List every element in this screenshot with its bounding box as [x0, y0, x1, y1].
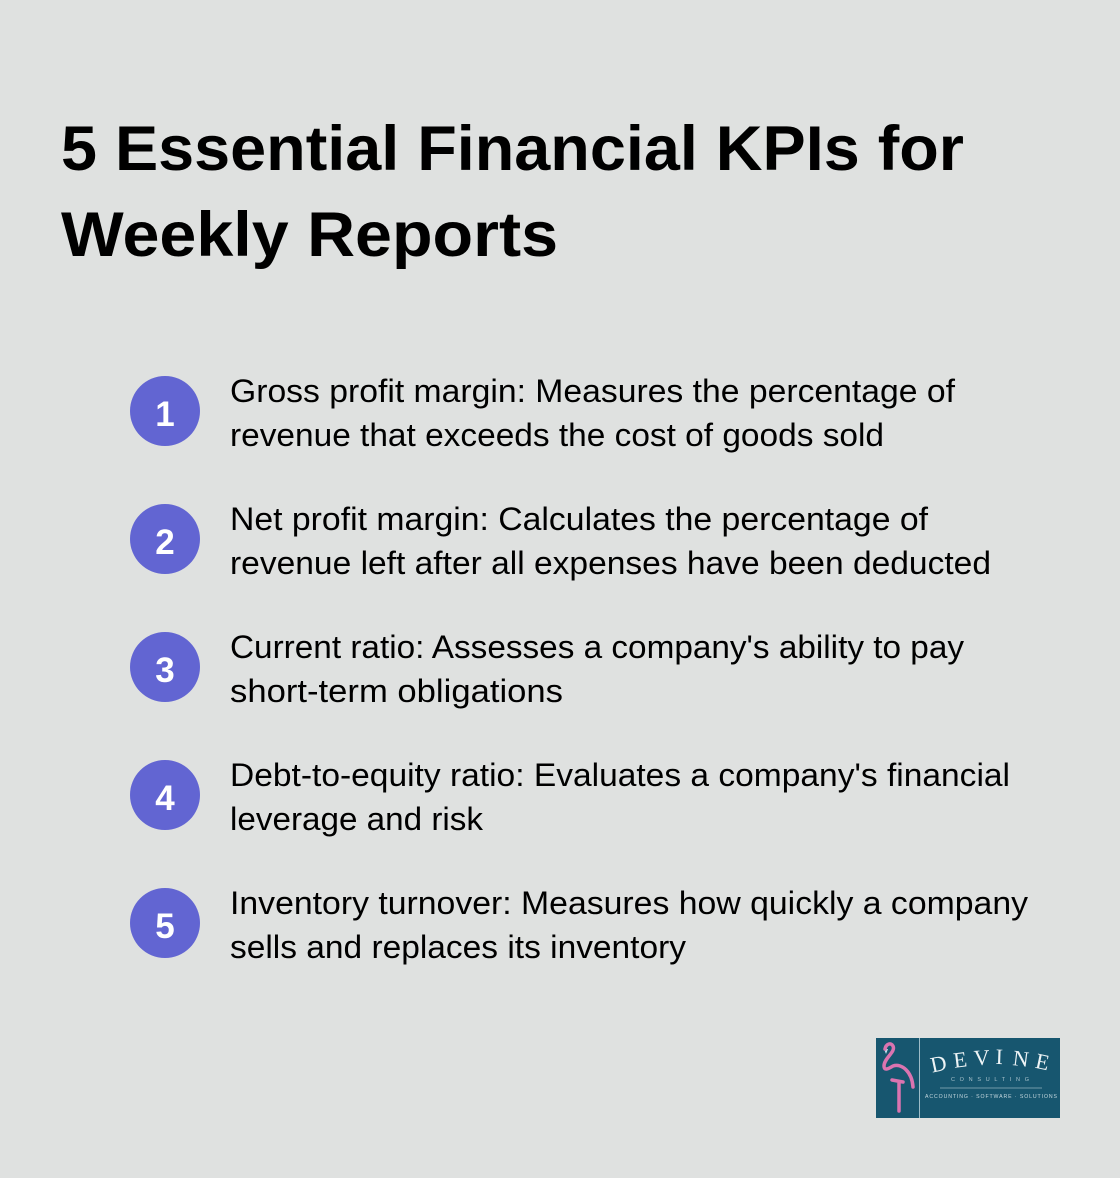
- logo wordmark: [925, 1044, 1058, 1100]
- item 5: inventory turnover: [130, 885, 1028, 965]
- item 4: debt-to-equity ratio: [130, 757, 1010, 837]
- item 2: net profit margin: [130, 501, 991, 581]
- logo wordmark: V: [973, 1045, 990, 1070]
- item 5: inventory turnover: 5: [155, 907, 175, 946]
- item 3: current ratio: short-term obligations: [230, 673, 563, 709]
- item 5: inventory turnover: Inventory turnover: Measures how quickly a company: [230, 885, 1028, 921]
- logo wordmark: I: [995, 1044, 1003, 1069]
- item 2: net profit margin: revenue left after all expenses have been deducted: [230, 545, 991, 581]
- item 1: gross profit margin: [130, 373, 955, 453]
- title: Weekly Reports: [61, 200, 558, 270]
- item 4: debt-to-equity ratio: Debt-to-equity ratio: Evaluates a company's financial: [230, 757, 1010, 793]
- logo wordmark: E: [952, 1046, 968, 1073]
- logo wordmark: D: [928, 1050, 949, 1078]
- logo wordmark: ACCOUNTING · SOFTWARE · SOLUTIONS: [925, 1094, 1058, 1100]
- logo wordmark: N: [1012, 1045, 1030, 1072]
- item 3: current ratio: [130, 629, 964, 709]
- item 2: net profit margin: 2: [155, 523, 175, 562]
- item 1: gross profit margin: Gross profit margin: Measures the percentage of: [230, 373, 955, 409]
- logo wordmark: CONSULTING: [951, 1077, 1029, 1083]
- item 3: current ratio: Current ratio: Assesses a company's ability to pay: [230, 629, 964, 665]
- item 2: net profit margin: Net profit margin: Calculates the percentage of: [230, 501, 928, 537]
- item 3: current ratio: 3: [155, 651, 175, 690]
- item 1: gross profit margin: 1: [155, 395, 175, 434]
- KPI list: [130, 373, 1028, 965]
- item 4: debt-to-equity ratio: 4: [155, 779, 175, 818]
- icon: flamingo: [884, 1044, 913, 1111]
- item 1: gross profit margin: revenue that exceeds the cost of goods sold: [230, 417, 884, 453]
- title: [61, 114, 964, 270]
- title: 5 Essential Financial KPIs for: [61, 114, 964, 184]
- item 4: debt-to-equity ratio: leverage and risk: [230, 801, 484, 837]
- logo wordmark: E: [1033, 1048, 1052, 1075]
- item 5: inventory turnover: sells and replaces its inventory: [230, 929, 686, 965]
- logo: Devine Consulting: [876, 1038, 1060, 1118]
